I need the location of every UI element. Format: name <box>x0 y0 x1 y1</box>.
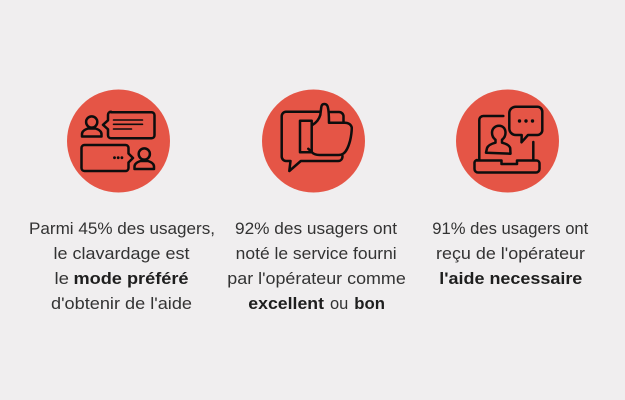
text: help received: l'aide necessaire <box>439 270 582 288</box>
text: service rating: bon <box>354 295 385 313</box>
text: service rating: 92% des usagers ont <box>235 220 397 238</box>
panel: help received <box>432 90 589 288</box>
text: chat preference: mode préféré <box>74 270 188 288</box>
text: chat preference: Parmi 45% des usagers, <box>29 220 215 238</box>
text: help received <box>432 220 589 288</box>
text: chat preference: le <box>54 270 69 288</box>
icon: laptop with operator and speech bubble <box>456 90 559 192</box>
text: service rating: excellent <box>248 295 325 313</box>
text: chat preference <box>29 220 215 313</box>
panel: service rating <box>227 90 406 313</box>
text: service rating: noté le service fourni <box>236 245 397 263</box>
icon: chat between two people <box>67 90 170 192</box>
text: service rating: par l'opérateur comme <box>227 270 406 288</box>
text: chat preference: d'obtenir de l'aide <box>51 295 192 313</box>
text: help received: 91% des usagers ont <box>432 220 589 238</box>
panel: chat preference <box>29 90 215 313</box>
text: help received: reçu de l'opérateur <box>436 245 586 263</box>
text: chat preference: le clavardage est <box>54 245 190 263</box>
icon: thumbs up in speech bubble <box>262 90 365 192</box>
text: service rating: ou <box>330 295 348 313</box>
text: service rating <box>227 220 406 313</box>
